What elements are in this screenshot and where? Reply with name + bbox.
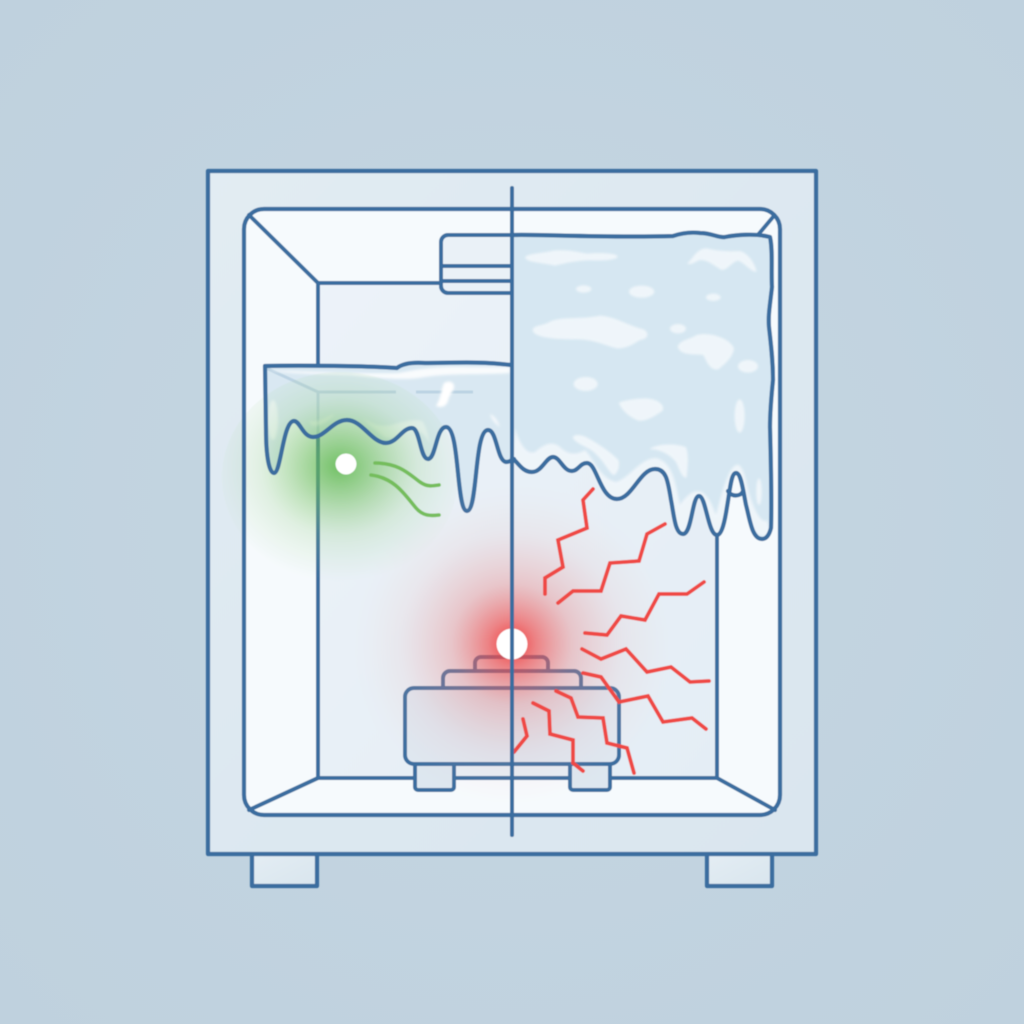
compressor body <box>405 688 619 764</box>
green cold spot dot <box>336 454 356 474</box>
green glow: cold spot <box>222 372 458 582</box>
evaporator unit <box>441 235 512 293</box>
right frost outline <box>512 233 773 539</box>
interior cavity outline <box>244 209 780 815</box>
inner frost arc <box>728 491 743 496</box>
compressor top cap <box>475 657 548 671</box>
back wall <box>318 283 717 778</box>
right ice highlights <box>525 248 762 505</box>
green cold-air wisps <box>371 463 439 515</box>
fridge interior <box>244 209 780 815</box>
right ice white rim <box>513 428 770 536</box>
interior cavity <box>244 209 780 815</box>
left frost outline <box>265 362 514 511</box>
red hot spot dot <box>496 628 528 660</box>
left ice fill <box>265 362 511 511</box>
compressor middle tier <box>443 671 581 688</box>
left ice inner edges <box>266 368 473 437</box>
compressor feet <box>415 764 610 790</box>
red glow: compressor heat <box>352 484 672 804</box>
frost outlines <box>265 233 773 539</box>
fridge illustration <box>208 171 816 886</box>
fridge outer body <box>208 171 816 854</box>
right frost sheet <box>512 233 773 539</box>
perspective lines <box>249 215 775 810</box>
compressor <box>405 657 619 790</box>
left ice highlights <box>268 367 510 443</box>
left frost sheet <box>265 362 511 511</box>
right ice fill <box>512 233 773 539</box>
fridge feet <box>252 853 772 886</box>
central divider line <box>510 188 514 835</box>
red heat cracks <box>514 489 709 773</box>
